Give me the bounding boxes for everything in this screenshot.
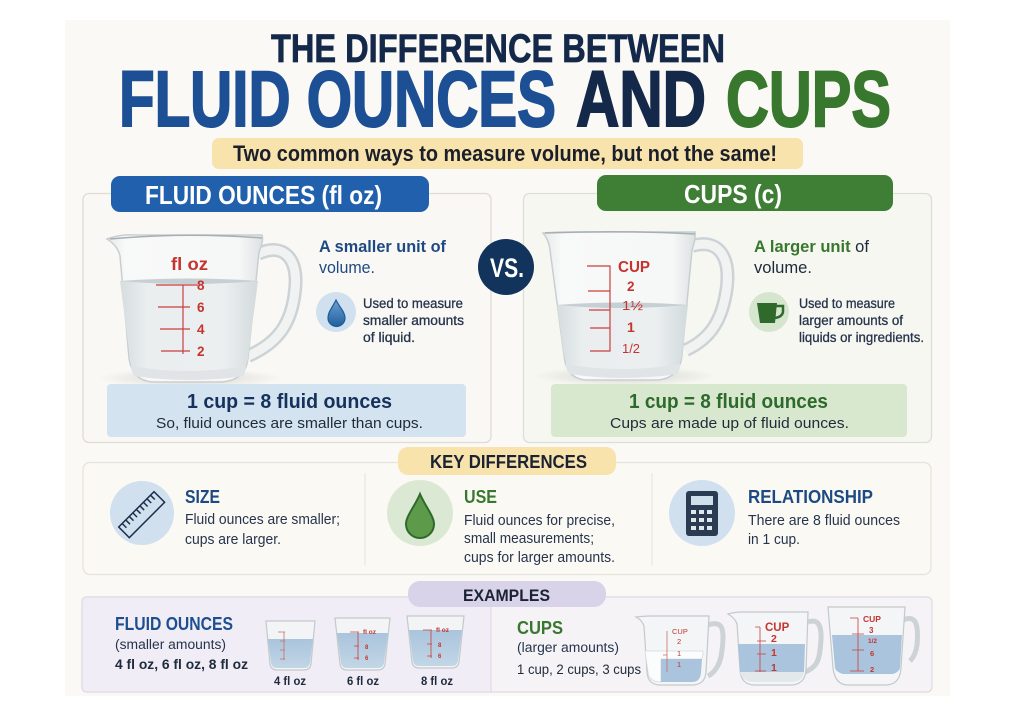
heading: examples: EXAMPLES <box>463 586 550 605</box>
conversion box: cups <box>551 384 907 437</box>
conversion box: fluid ounces <box>107 384 466 437</box>
glass: 8 fl oz: fl oz <box>436 627 450 634</box>
cup example: 3 cups <box>828 607 917 685</box>
usage note: cups: larger amounts of <box>799 313 903 328</box>
measuring cup: cups: 1 <box>627 319 635 335</box>
examples text: fluid ounces <box>115 614 248 672</box>
item: size: Fluid ounces are smaller; <box>185 512 340 528</box>
examples text: cups <box>517 618 641 677</box>
title: AND <box>576 54 706 143</box>
conversion box: fluid ounces: So, fluid ounces are smaller than cups. <box>156 415 423 432</box>
title: THE DIFFERENCE BETWEEN <box>271 27 725 71</box>
description: smaller unit <box>319 238 446 277</box>
glass: 6 fl oz <box>335 618 390 688</box>
cup scale <box>587 266 610 351</box>
vs badge <box>478 239 534 295</box>
usage note: cups <box>799 296 924 345</box>
usage note: fluid ounces: Used to measure <box>363 296 463 311</box>
heading: key differences: KEY DIFFERENCES <box>430 452 587 472</box>
icon: ruler <box>110 481 174 545</box>
icon: calculator <box>669 480 735 546</box>
measuring cup: cups: 1/2 <box>622 342 640 356</box>
measuring cup: fluid ounces: 4 <box>197 322 205 337</box>
glass: 8 fl oz <box>407 616 464 688</box>
usage note: fluid ounces: of liquid. <box>363 330 415 345</box>
examples text: cups: (larger amounts) <box>517 640 619 655</box>
cup example: 1 cup <box>636 616 723 685</box>
glass: 6 fl oz: fl oz <box>363 629 377 636</box>
measuring cup: cups <box>533 232 727 386</box>
panel: fluid ounces <box>83 176 491 442</box>
cup example: 3 cups: 6 <box>870 649 874 658</box>
description: smaller unit: volume. <box>319 259 375 277</box>
heading: examples <box>408 581 606 607</box>
usage note: cups: liquids or ingredients. <box>799 330 924 345</box>
title <box>119 27 891 143</box>
glass: 6 fl oz: 6 fl oz <box>347 674 379 688</box>
panel: examples <box>82 581 932 692</box>
examples text: fluid ounces: FLUID OUNCES <box>115 614 233 634</box>
item: relationship: in 1 cup. <box>748 532 800 548</box>
vs badge: VS. <box>490 253 524 283</box>
description: smaller unit: A smaller unit of <box>319 238 446 256</box>
icon: water drop <box>316 292 356 332</box>
cup example: 3 cups: 1/2 <box>868 638 877 645</box>
title: CUPS <box>726 54 891 143</box>
examples text: fluid ounces: (smaller amounts) <box>115 637 226 652</box>
measuring cup: cups: 2 <box>627 279 635 294</box>
panel: key differences <box>83 447 931 574</box>
glass: 6 fl oz: 6 <box>365 656 369 662</box>
cup scale <box>156 285 198 354</box>
item: use: USE <box>464 487 497 507</box>
examples text: fluid ounces: 4 fl oz, 6 fl oz, 8 fl oz <box>115 657 248 672</box>
item: size: SIZE <box>185 487 220 507</box>
cup example: 3 cups: 3 <box>869 626 874 635</box>
measuring cup: fluid ounces: 8 <box>197 278 205 293</box>
cup example: 1 cup: CUP <box>672 627 688 636</box>
heading: key differences <box>398 447 616 475</box>
item: relationship: There are 8 fluid ounces <box>748 513 900 529</box>
item: size: cups are larger. <box>185 532 281 548</box>
cup example: 1 cup: 1 <box>677 660 681 669</box>
item: relationship: RELATIONSHIP <box>748 487 873 507</box>
heading: fluid ounces: FLUID OUNCES (fl oz) <box>145 180 382 210</box>
conversion box: fluid ounces: 1 cup = 8 fluid ounces <box>187 391 392 413</box>
cup example: 2 cups: CUP <box>765 622 790 634</box>
usage note: fluid ounces: smaller amounts <box>363 313 464 328</box>
measuring cup: fluid ounces: 6 <box>197 300 205 315</box>
examples text: cups: CUPS <box>517 618 563 638</box>
item: relationship <box>669 480 900 548</box>
glass: 8 fl oz: 8 <box>438 643 442 649</box>
cup example: 2 cups: 1 <box>771 662 777 674</box>
cup example: 3 cups: 2 <box>870 665 874 674</box>
item: use: small measurements; <box>464 531 594 547</box>
measuring cup: fluid ounces: 2 <box>197 344 205 359</box>
item: use <box>387 480 615 566</box>
description: larger unit: A larger unit of <box>754 238 869 256</box>
heading: cups <box>597 175 893 211</box>
cup example: 2 cups: 2 <box>771 633 777 645</box>
description: larger unit: volume. <box>754 259 812 277</box>
glass: 8 fl oz: 6 <box>438 654 442 660</box>
icon: green drop <box>387 480 453 546</box>
usage note: cups: Used to measure <box>799 296 895 311</box>
panel: cups <box>524 175 932 442</box>
conversion box: cups: Cups are made up of fluid ounces. <box>610 415 849 432</box>
subtitle banner: Two common ways to measure volume, but not the same! <box>233 141 777 166</box>
conversion box: cups: 1 cup = 8 fluid ounces <box>629 391 828 413</box>
examples text: cups: 1 cup, 2 cups, 3 cups <box>517 662 641 677</box>
measuring cup: fluid ounces: fl oz <box>171 254 208 274</box>
item: size <box>110 481 340 548</box>
cup example: 1 cup: 1 <box>677 649 681 658</box>
cup example: 3 cups: CUP <box>863 614 881 624</box>
usage note: fluid ounces <box>363 296 464 345</box>
description: larger unit <box>754 238 869 277</box>
glass: 4 fl oz: 4 fl oz <box>274 674 306 688</box>
measuring cup: cups: 1½ <box>622 299 644 313</box>
title: FLUID OUNCES <box>119 54 556 143</box>
cup example: 2 cups: 1 <box>771 647 777 659</box>
heading: cups: CUPS (c) <box>684 179 782 209</box>
icon: cup <box>749 292 789 332</box>
glass: 8 fl oz: 8 fl oz <box>421 674 453 688</box>
item: use: Fluid ounces for precise, <box>464 513 615 529</box>
glass: 4 fl oz <box>266 621 315 688</box>
measuring cup: cups: CUP <box>618 259 650 276</box>
measuring cup: fluid ounces <box>98 235 296 388</box>
item: use: cups for larger amounts. <box>464 550 615 566</box>
cup example: 2 cups <box>728 612 821 685</box>
cup example: 1 cup: 2 <box>677 637 681 646</box>
glass: 6 fl oz: 8 <box>365 645 369 651</box>
